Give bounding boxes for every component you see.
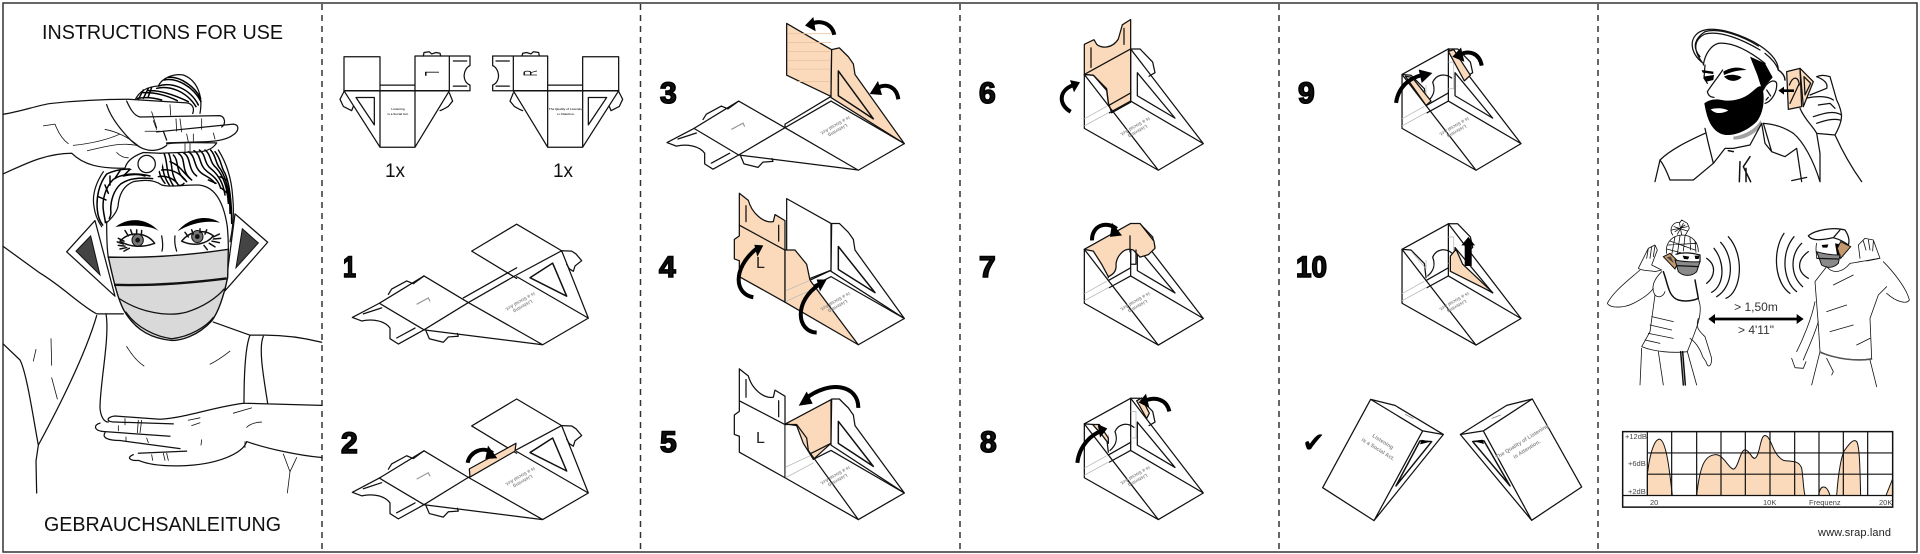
- step 6 number: 6: [979, 77, 996, 110]
- net: right part: is Attention.: [557, 112, 575, 116]
- panel: steps 3-5: [659, 17, 904, 520]
- label: distance imperial: > 4'11": [1738, 323, 1774, 337]
- panel: steps 6-8: [979, 20, 1203, 520]
- finished piece: right: is Attention.: [1513, 439, 1542, 461]
- step 2 number: 2: [341, 427, 358, 460]
- step 3 drawing: [667, 17, 904, 170]
- chart: frequency response: 20K: [1879, 498, 1892, 507]
- chart: frequency response: +2dB: [1628, 487, 1646, 496]
- panel: flat nets and steps 1-2: [340, 52, 623, 520]
- net: right part: [493, 52, 623, 147]
- step 4 drawing: L: [756, 255, 765, 272]
- dashed fold lines: [322, 4, 1598, 551]
- label: 1x right: 1x: [553, 161, 574, 182]
- step 4 drawing: [734, 193, 904, 345]
- chart: frequency response: [1623, 432, 1893, 507]
- panel: usage and frequency: [1607, 29, 1909, 539]
- step 10 number: 10: [1296, 251, 1327, 284]
- step 5 drawing: is a Social Act.: [819, 464, 851, 486]
- step 10 drawing: is a Social Act.: [1438, 290, 1470, 312]
- finished piece: right: The Quality of Listening: [1495, 423, 1550, 461]
- step 10 drawing: [1402, 224, 1521, 345]
- chart: frequency response: 20: [1650, 498, 1658, 507]
- step 7 drawing: [1084, 223, 1203, 345]
- chart: frequency response: +6dB: [1628, 459, 1646, 468]
- step 6 drawing: Listening: [1127, 123, 1148, 139]
- finished piece: left: Listening: [1371, 433, 1394, 451]
- net: left part: Listening: [391, 107, 405, 111]
- step 1 drawing: is a Social Act.: [504, 290, 536, 312]
- step 5 drawing: Listening: [827, 472, 848, 488]
- step 7 drawing: Listening: [1127, 298, 1148, 314]
- step 3 drawing: is a Social Act.: [819, 114, 851, 136]
- step 8 number: 8: [980, 426, 997, 459]
- heading: instructions for use: INSTRUCTIONS FOR USE: [42, 22, 283, 44]
- step 5 drawing: [734, 369, 904, 520]
- step 7 number: 7: [979, 251, 996, 284]
- chart: frequency response: +12dB: [1625, 432, 1647, 441]
- step 3 number: 3: [660, 77, 677, 110]
- net: left part: L: [420, 71, 442, 76]
- label: 1x left: 1x: [385, 161, 406, 182]
- panel: steps 9-10 and finished pieces: [1296, 48, 1582, 521]
- step 1 drawing: [352, 224, 588, 345]
- step 7 drawing: is a Social Act.: [1119, 290, 1151, 312]
- chart: frequency response: 10K: [1763, 498, 1776, 507]
- illustration: bearded man holding the horn to his ear: [1655, 29, 1862, 182]
- step 8 drawing: [1077, 394, 1203, 520]
- chart: frequency response: Frequenz: [1809, 498, 1841, 507]
- step 6 drawing: [1062, 20, 1203, 170]
- step 2 drawing: Listening: [512, 473, 533, 489]
- website address: www.srap.land: [1817, 527, 1891, 539]
- net: left part: [340, 52, 470, 147]
- step 4 drawing: Listening: [827, 298, 848, 314]
- label: distance metric: > 1,50m: [1734, 300, 1778, 314]
- net: right part: R: [520, 70, 542, 76]
- step 4 drawing: is a Social Act.: [819, 290, 851, 312]
- panel: title and mask wearer: [3, 22, 322, 536]
- step 9 number: 9: [1298, 77, 1315, 110]
- finished check mark: ✔: [1302, 426, 1325, 459]
- net: right part: The Quality of Listening: [549, 107, 583, 111]
- step 9 drawing: Listening: [1446, 123, 1467, 139]
- step 2 drawing: is a Social Act.: [504, 465, 536, 487]
- step 5 number: 5: [660, 426, 677, 459]
- step 10 drawing: Listening: [1446, 298, 1467, 314]
- step 5 drawing: L: [756, 430, 765, 447]
- step 2 drawing: [352, 399, 588, 520]
- step 4 number: 4: [659, 251, 676, 284]
- step 9 drawing: is a Social Act.: [1438, 115, 1470, 137]
- step 1 number: 1: [343, 251, 356, 284]
- step 9 drawing: [1396, 48, 1521, 170]
- illustration: woman wearing mask with paper ear horns: [3, 75, 322, 493]
- finished piece: left: [1323, 399, 1443, 521]
- step 8 drawing: Listening: [1127, 472, 1148, 488]
- step 8 drawing: is a Social Act.: [1119, 464, 1151, 486]
- step 1 drawing: Listening: [512, 298, 533, 314]
- finished piece: left: is a Social Act.: [1360, 437, 1396, 463]
- finished piece: right: [1460, 399, 1582, 520]
- step 3 drawing: Listening: [827, 122, 848, 138]
- heading: gebrauchsanleitung: GEBRAUCHSANLEITUNG: [44, 514, 281, 536]
- net: left part: is a Social Act.: [387, 112, 409, 116]
- illustration: two people at a distance with sound waves: [1607, 220, 1909, 387]
- step 6 drawing: is a Social Act.: [1119, 115, 1151, 137]
